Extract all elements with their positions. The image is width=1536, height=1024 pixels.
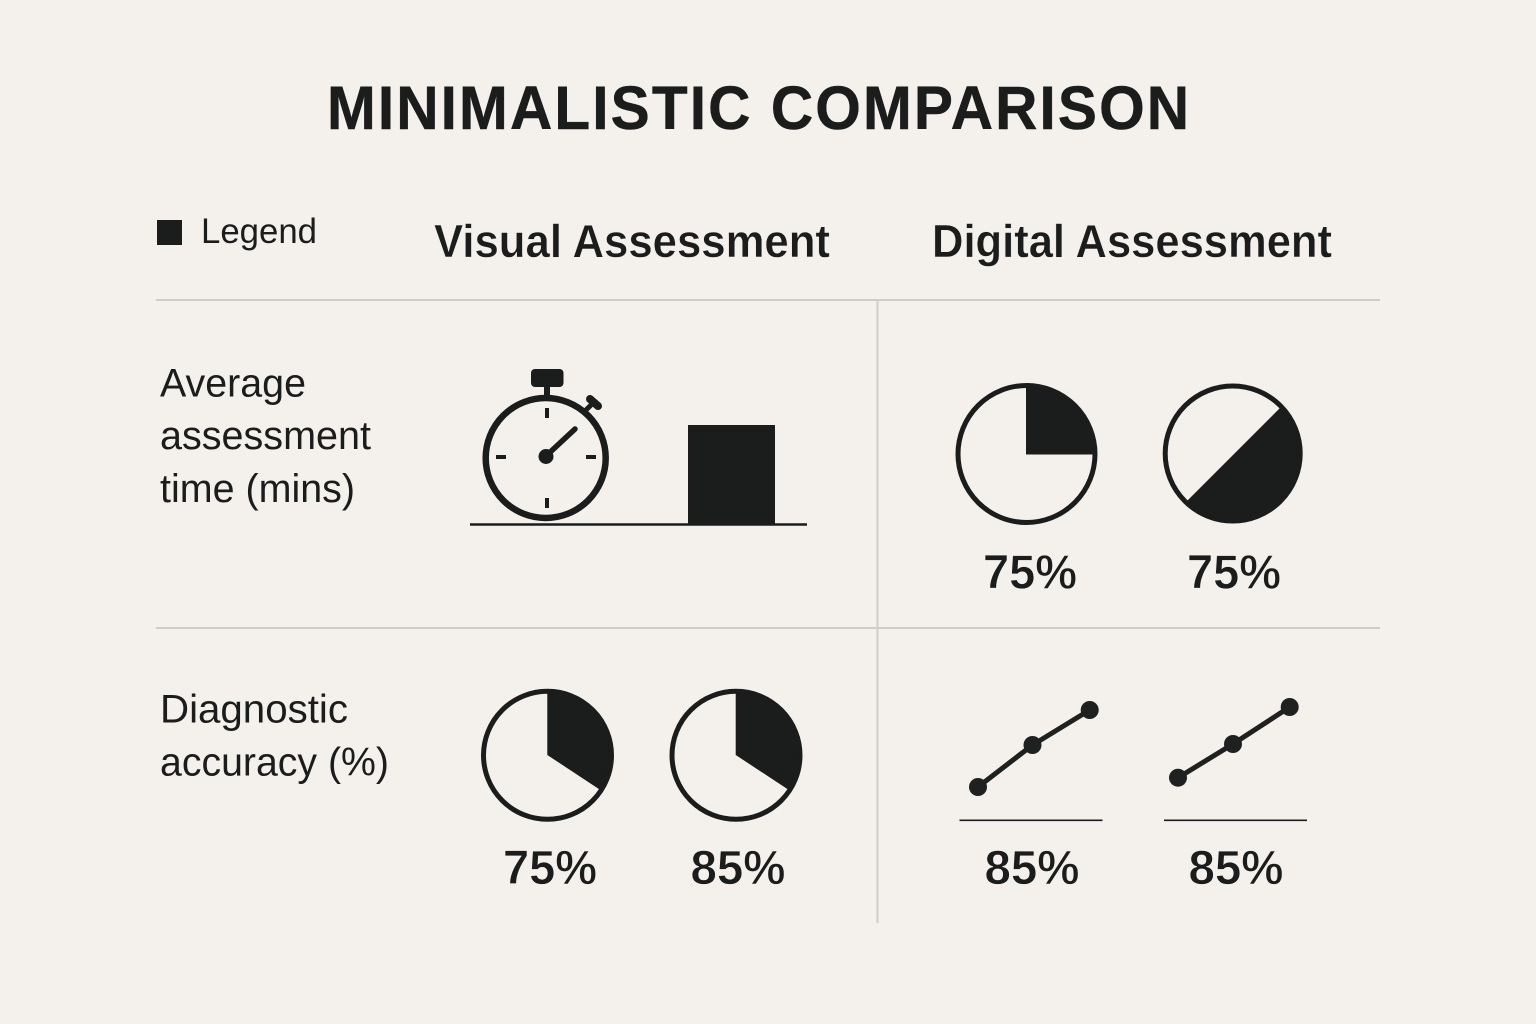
- column heading: visual assessment: Visual Assessment: [434, 215, 830, 267]
- value: 85%: 85%: [1188, 842, 1284, 895]
- line chart: digital accuracy 2: [1164, 698, 1307, 820]
- value: 85%: 85%: [984, 842, 1080, 895]
- column heading: digital assessment: Digital Assessment: [932, 215, 1332, 267]
- bar chart: visual time: [470, 425, 807, 525]
- value: 75%: 75%: [503, 842, 597, 895]
- icon: stopwatch: [486, 369, 606, 518]
- row label: average assessment time: time (mins): [160, 467, 355, 511]
- row label: diagnostic accuracy: Diagnostic: [160, 688, 348, 732]
- row label: average assessment time: [160, 362, 371, 511]
- value: 75%: 75%: [1187, 546, 1281, 600]
- row label: diagnostic accuracy: [160, 688, 389, 784]
- pie: visual accuracy 1: [484, 690, 612, 819]
- value: 85%: 85%: [690, 842, 786, 895]
- legend: Legend: [201, 212, 317, 251]
- value: 75%: 75%: [983, 546, 1077, 600]
- row label: diagnostic accuracy: accuracy (%): [160, 740, 389, 784]
- pie: visual accuracy 2: [672, 690, 801, 819]
- pie: digital time 2: [1165, 386, 1302, 522]
- line chart: digital accuracy 1: [960, 701, 1102, 820]
- row label: average assessment time: assessment: [160, 414, 371, 458]
- title: MINIMALISTIC COMPARISON: [327, 74, 1189, 142]
- pie: digital time 1: [958, 385, 1095, 522]
- row label: average assessment time: Average: [160, 362, 306, 406]
